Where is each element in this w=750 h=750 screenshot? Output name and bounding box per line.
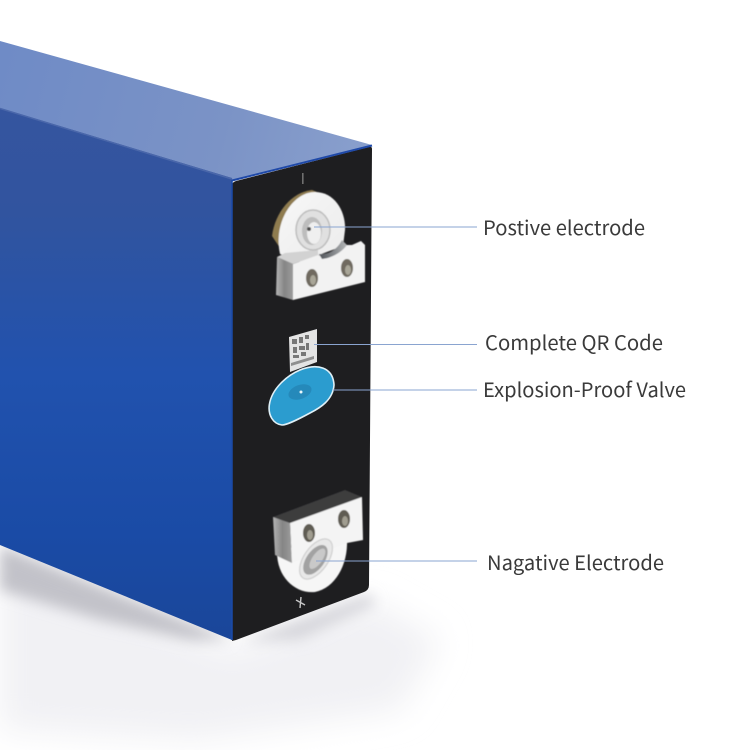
label: negative electrode: Nagative Electrode xyxy=(487,547,664,576)
cap xyxy=(296,210,330,250)
blue side face xyxy=(0,108,232,640)
explosion-proof valve xyxy=(269,367,334,425)
block top xyxy=(273,490,362,523)
terminal end panel xyxy=(232,147,372,641)
disc xyxy=(279,192,345,262)
block side xyxy=(273,517,292,563)
leader line: valve xyxy=(333,389,477,391)
ground shadow xyxy=(0,545,440,740)
leader line: QR code xyxy=(314,344,477,346)
QR code label xyxy=(289,329,317,372)
block side xyxy=(276,257,293,300)
block front xyxy=(290,497,363,563)
valve dimple xyxy=(286,381,314,403)
polarity mark: top xyxy=(302,173,304,184)
leader line: positive electrode xyxy=(314,226,477,228)
brass backing xyxy=(272,190,322,254)
block front xyxy=(293,241,365,300)
panel left rim xyxy=(231,180,233,640)
top side edge xyxy=(0,108,232,179)
block top edge xyxy=(277,250,318,264)
battery body xyxy=(0,41,372,641)
polarity mark: bottom xyxy=(296,597,305,608)
negative electrode terminal xyxy=(273,490,363,592)
disc xyxy=(277,540,347,592)
top face xyxy=(0,41,372,180)
panel top rim xyxy=(232,146,372,180)
label: explosion-proof valve: Explosion-Proof Valve xyxy=(483,374,686,403)
screw right xyxy=(338,510,350,528)
cap xyxy=(293,533,339,585)
notch shadow xyxy=(319,240,347,259)
screw right xyxy=(341,259,353,277)
screw left xyxy=(303,524,315,542)
screw left xyxy=(306,269,318,287)
label: positive electrode: Postive electrode xyxy=(483,212,645,241)
label: QR code: Complete QR Code xyxy=(485,327,663,356)
leader line: negative electrode xyxy=(316,560,477,562)
positive electrode terminal xyxy=(272,190,365,300)
